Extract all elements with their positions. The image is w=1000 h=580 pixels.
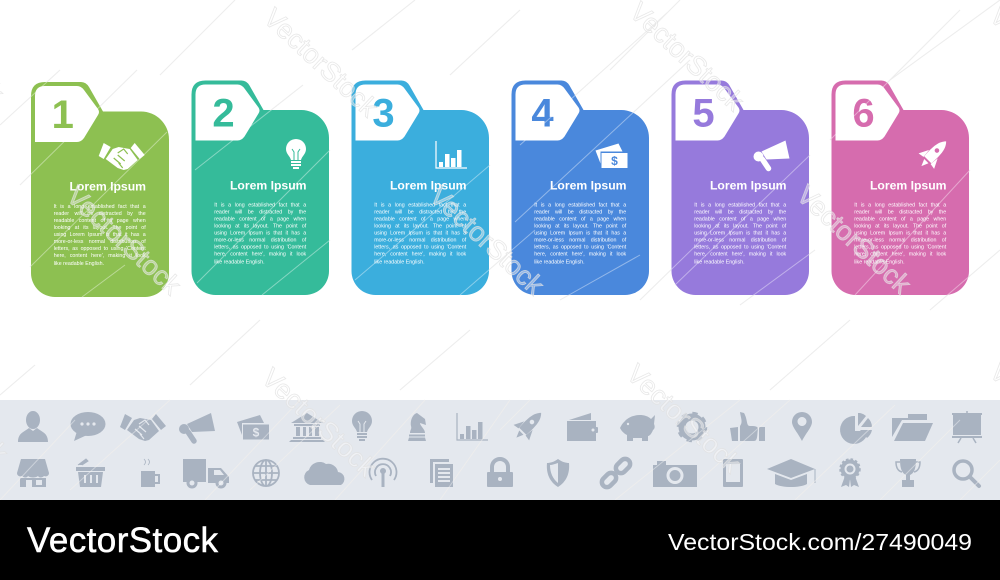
text block: using Lorem Ipsum is that it has a [54,232,146,238]
text block: reader will be distracted by the [694,209,786,215]
text block: looking at its layout. The point of [534,223,626,229]
icon: magnifier [954,461,979,486]
text block: letters, as opposed to using 'Content [534,245,626,251]
icon: handshake [120,414,166,441]
icon: rocket [509,405,549,445]
icon: graduation cap [767,459,815,487]
icon: documents [430,459,453,487]
number: 2 [212,92,235,136]
icon: presentation board [952,411,982,443]
heading: Lorem Ipsum [230,178,307,192]
icon: medal [840,460,860,487]
text block: looking at its layout. The point of [854,223,946,229]
icon: wallet [567,413,598,441]
text block [214,202,307,272]
text block: like readable English. [54,260,104,266]
text block: looking at its layout. The point of [214,223,306,229]
text block: letters, as opposed to using 'Content [854,245,946,251]
card shape [832,80,969,295]
card shape [192,80,329,295]
text block: more-or-less normal distribution of [214,238,306,244]
text block: letters, as opposed to using 'Content [374,245,466,251]
text block: readable content of a page when [54,218,146,224]
icon: money [237,415,269,440]
icon: bar chart [436,141,467,168]
text block: using Lorem Ipsum is that it has a [694,230,786,236]
text block: letters, as opposed to using 'Content [694,245,786,251]
icon: cloud [304,462,344,485]
text block: using Lorem Ipsum is that it has a [214,230,306,236]
text block: letters, as opposed to using 'Content [54,246,146,252]
text block [854,202,947,272]
icon: shield [547,459,569,487]
heading: Lorem Ipsum [550,178,627,192]
text block: here, content here', making it look [534,252,626,258]
text block [534,202,627,272]
number: 4 [531,92,554,136]
text block: here, content here', making it look [854,252,946,258]
text block: It is a long established fact that a [374,202,466,208]
text block [54,204,147,274]
text block: readable content of a page when [694,216,786,222]
text block: more-or-less normal distribution of [534,238,626,244]
card shape [672,80,809,295]
icon: map pin [792,412,812,441]
text block: looking at its layout. The point of [54,225,146,231]
icon: gear [679,414,705,440]
text block [694,202,787,272]
text block: more-or-less normal distribution of [54,239,146,245]
icon: chess knight [408,413,426,441]
text block: like readable English. [534,259,585,265]
watermark text: VectorStock [424,180,550,301]
text block: more-or-less normal distribution of [374,238,466,244]
number: 3 [372,92,395,136]
text block: using Lorem Ipsum is that it has a [374,230,466,236]
icon: light bulb [352,411,372,441]
icon: antenna [370,459,396,487]
heading: Lorem Ipsum [69,180,146,194]
number: 6 [852,92,875,136]
text block: here, content here', making it look [694,252,786,258]
icon row 2 [17,457,979,489]
number tab [196,84,260,140]
text block: here, content here', making it look [214,252,306,258]
heading: Lorem Ipsum [870,178,947,192]
text block: readable content of a page when [854,216,946,222]
icon: megaphone [754,140,790,168]
number: 1 [52,93,74,137]
icon: smartphone [723,459,743,487]
text block: like readable English. [854,259,905,265]
panel: step 3 [352,80,489,295]
text block: reader will be distracted by the [534,209,626,215]
heading: Lorem Ipsum [710,178,787,192]
text block: readable content of a page when [214,216,306,222]
icon: truck [183,459,229,488]
text block: reader will be distracted by the [854,209,946,215]
number tab [676,84,740,140]
icon: person [18,411,48,442]
icon: thumbs up [730,412,765,441]
watermark text: VectorStock [624,0,750,117]
card shape [352,80,489,295]
icon: coffee cup [141,459,160,487]
icon: light bulb [286,139,306,169]
text block: like readable English. [374,259,425,265]
text block: like readable English. [694,259,745,265]
text block: reader will be distracted by the [374,209,466,215]
icon: shop [17,459,49,487]
text block: using Lorem Ipsum is that it has a [534,230,626,236]
text block: reader will be distracted by the [214,209,306,215]
text block: using Lorem Ipsum is that it has a [854,230,946,236]
panel: step 4 [512,80,649,295]
icon: basket [76,459,105,487]
icon: rocket [914,134,954,174]
watermark text: VectorStock [258,2,384,123]
card shape [31,82,169,297]
number tab [356,84,420,140]
icon: bank [289,413,325,442]
text block: here, content here', making it look [374,252,466,258]
heading: Lorem Ipsum [390,178,467,192]
text block: It is a long established fact that a [854,202,946,208]
icon: handshake [99,143,145,170]
text block: It is a long established fact that a [54,204,146,210]
text block: looking at its layout. The point of [694,223,786,229]
icon: camera [653,461,697,487]
text block: letters, as opposed to using 'Content [214,245,306,251]
text block: readable content of a page when [374,216,466,222]
panel: step 1 [31,82,169,297]
text block: here, content here', making it look [54,253,146,259]
icon: money [596,144,628,168]
icon: bar chart [457,413,488,440]
icon: padlock [487,459,513,487]
watermark text: VectorStock [61,180,187,301]
text block: like readable English. [214,259,265,265]
icon: megaphone [179,413,215,441]
panel: step 5 [672,80,809,295]
icon strip background [0,400,1000,500]
footer brand: VectorStock [27,521,218,560]
number tab [836,84,900,140]
text block: It is a long established fact that a [694,202,786,208]
text block: It is a long established fact that a [214,202,306,208]
footer bar [0,500,1000,580]
footer url: VectorStock.com/27490049 [668,529,972,555]
icon: trophy [896,459,920,487]
icon row 1 [18,405,982,445]
watermark text: VectorStock [791,179,917,300]
number tab [35,86,99,142]
text block: more-or-less normal distribution of [694,238,786,244]
panel: step 2 [192,80,329,295]
icon: pie chart [840,413,872,444]
icon: chain link [600,457,632,489]
number tab [516,84,580,140]
text block: more-or-less normal distribution of [854,238,946,244]
watermark text: VectorStock [621,358,747,479]
card shape [512,80,649,295]
icon: globe [253,460,279,486]
watermark text: VectorStock [256,362,382,483]
panel: step 6 [832,80,969,295]
icon: piggy bank [620,415,655,441]
text block: It is a long established fact that a [534,202,626,208]
text block: readable content of a page when [534,216,626,222]
text block: reader will be distracted by the [54,211,146,217]
text block [374,202,467,272]
icon: folder [892,414,933,441]
icon: speech bubble [70,412,106,441]
text block: looking at its layout. The point of [374,223,466,229]
number: 5 [692,92,715,136]
